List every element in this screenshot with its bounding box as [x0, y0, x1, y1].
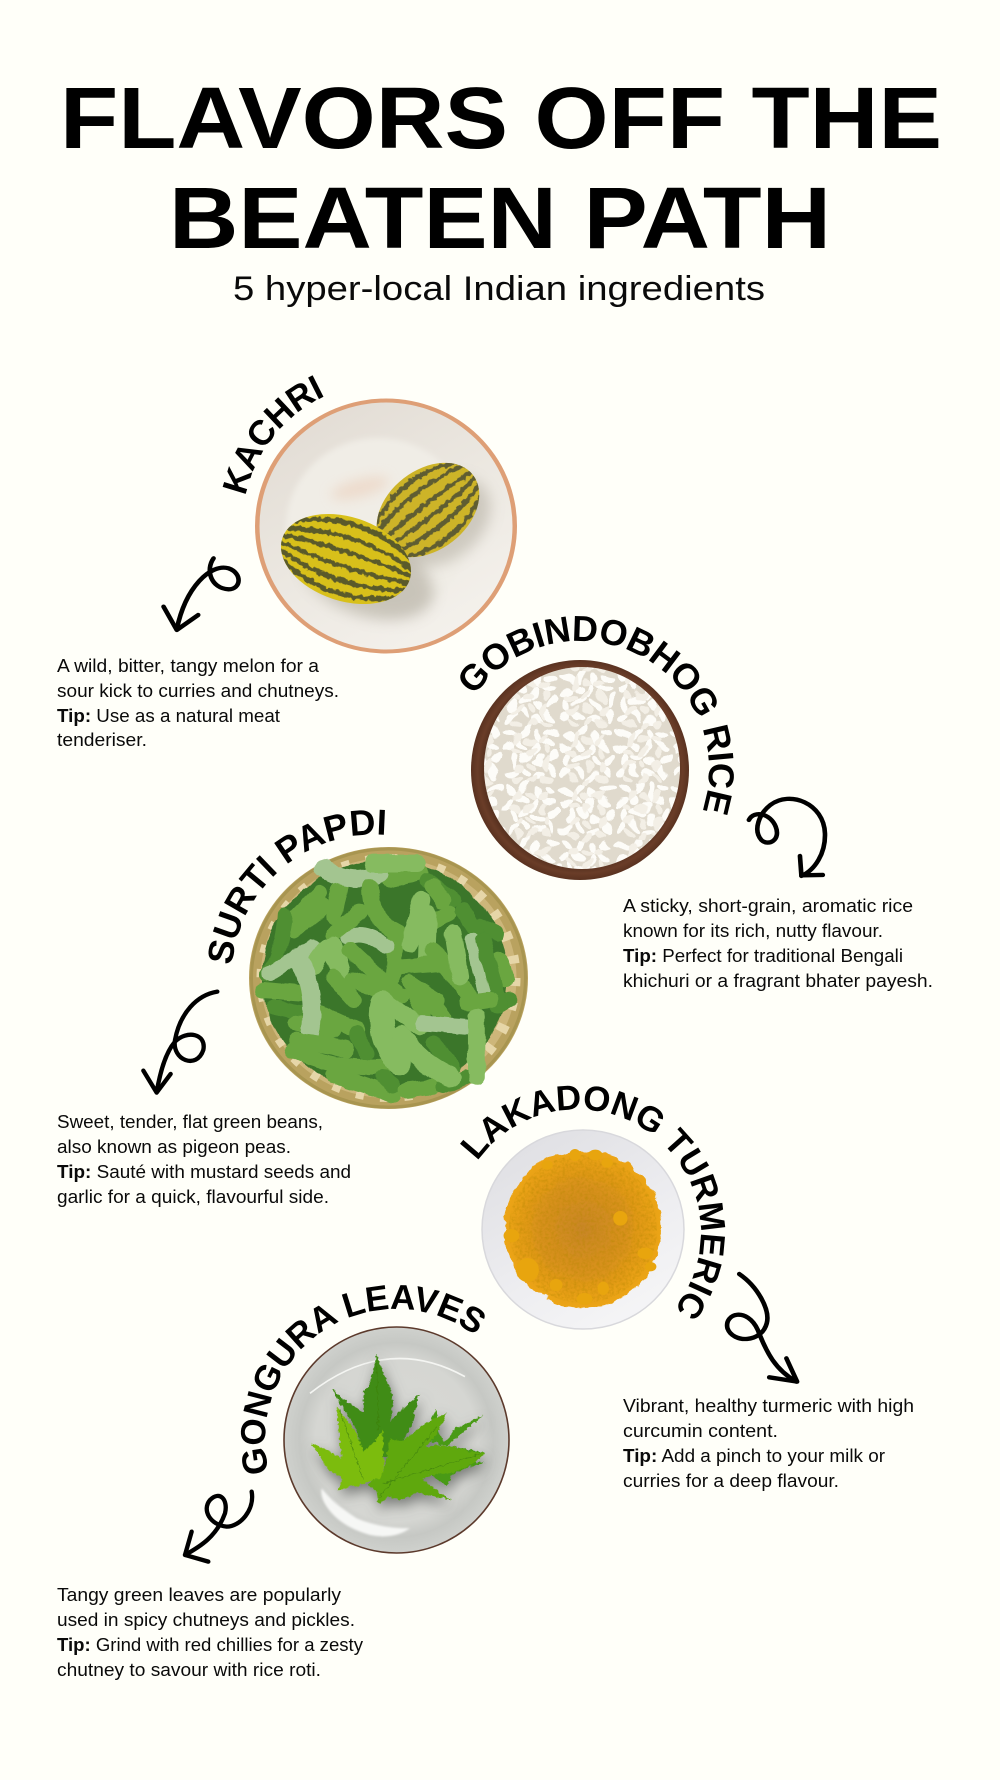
image: plate with green leaves	[284, 1327, 509, 1553]
description: Tip: Use as a natural meat	[57, 706, 280, 726]
description: Vibrant, healthy turmeric with high	[623, 1396, 914, 1416]
description: A wild, bitter, tangy melon for a	[57, 656, 320, 676]
title: BEATEN PATH	[169, 170, 831, 267]
description: khichuri or a fragrant bhater payesh.	[623, 971, 933, 991]
description: curries for a deep flavour.	[623, 1471, 839, 1491]
image: kachri melons on a plate	[243, 398, 520, 654]
image: bowl of rice	[470, 655, 694, 881]
description	[623, 896, 933, 991]
image: basket of green beans	[249, 847, 528, 1109]
label: SURTI PAPDI: SURTI PAPDI	[208, 810, 385, 964]
description	[623, 1396, 914, 1491]
description: used in spicy chutneys and pickles.	[57, 1610, 355, 1630]
description: sour kick to curries and chutneys.	[57, 681, 339, 701]
panel: gobindobhog rice	[426, 616, 933, 1018]
title: FLAVORS OFF THE	[60, 70, 942, 167]
arrow	[143, 992, 217, 1093]
arrow	[749, 799, 825, 876]
title	[60, 70, 942, 267]
description: also known as pigeon peas.	[57, 1137, 291, 1157]
description: chutney to savour with rice roti.	[57, 1660, 321, 1680]
description: Tip: Add a pinch to your milk or	[623, 1446, 885, 1466]
description: Tangy green leaves are popularly	[57, 1585, 341, 1605]
panel: kachri	[57, 375, 518, 766]
description: tenderiser.	[57, 730, 147, 750]
arrow	[727, 1274, 797, 1382]
panel: lakadong turmeric	[413, 1086, 914, 1532]
description: Tip: Sauté with mustard seeds and	[57, 1162, 351, 1182]
arrow	[185, 1492, 252, 1562]
panel: surti papdi	[57, 810, 528, 1207]
label: LAKADONG TURMERIC: LAKADONG TURMERIC	[460, 1086, 726, 1318]
description: Sweet, tender, flat green beans,	[57, 1112, 323, 1132]
description	[57, 1112, 351, 1207]
image: bowl of turmeric powder	[482, 1130, 684, 1329]
description	[57, 1585, 363, 1680]
description: Tip: Perfect for traditional Bengali	[623, 946, 903, 966]
arrow	[164, 558, 239, 630]
description: known for its rich, nutty flavour.	[623, 921, 883, 941]
description: garlic for a quick, flavourful side.	[57, 1187, 329, 1207]
description: A sticky, short-grain, aromatic rice	[623, 896, 913, 916]
panel: gongura leaves	[57, 1285, 510, 1680]
label: KACHRI: KACHRI	[222, 375, 324, 494]
description: Tip: Grind with red chillies for a zesty	[57, 1635, 363, 1655]
label: GONGURA LEAVES: GONGURA LEAVES	[240, 1285, 485, 1474]
subtitle: 5 hyper-local Indian ingredients	[233, 270, 765, 308]
description	[57, 656, 339, 750]
description: curcumin content.	[623, 1421, 778, 1441]
label: GOBINDOBHOG RICE: GOBINDOBHOG RICE	[460, 616, 734, 815]
